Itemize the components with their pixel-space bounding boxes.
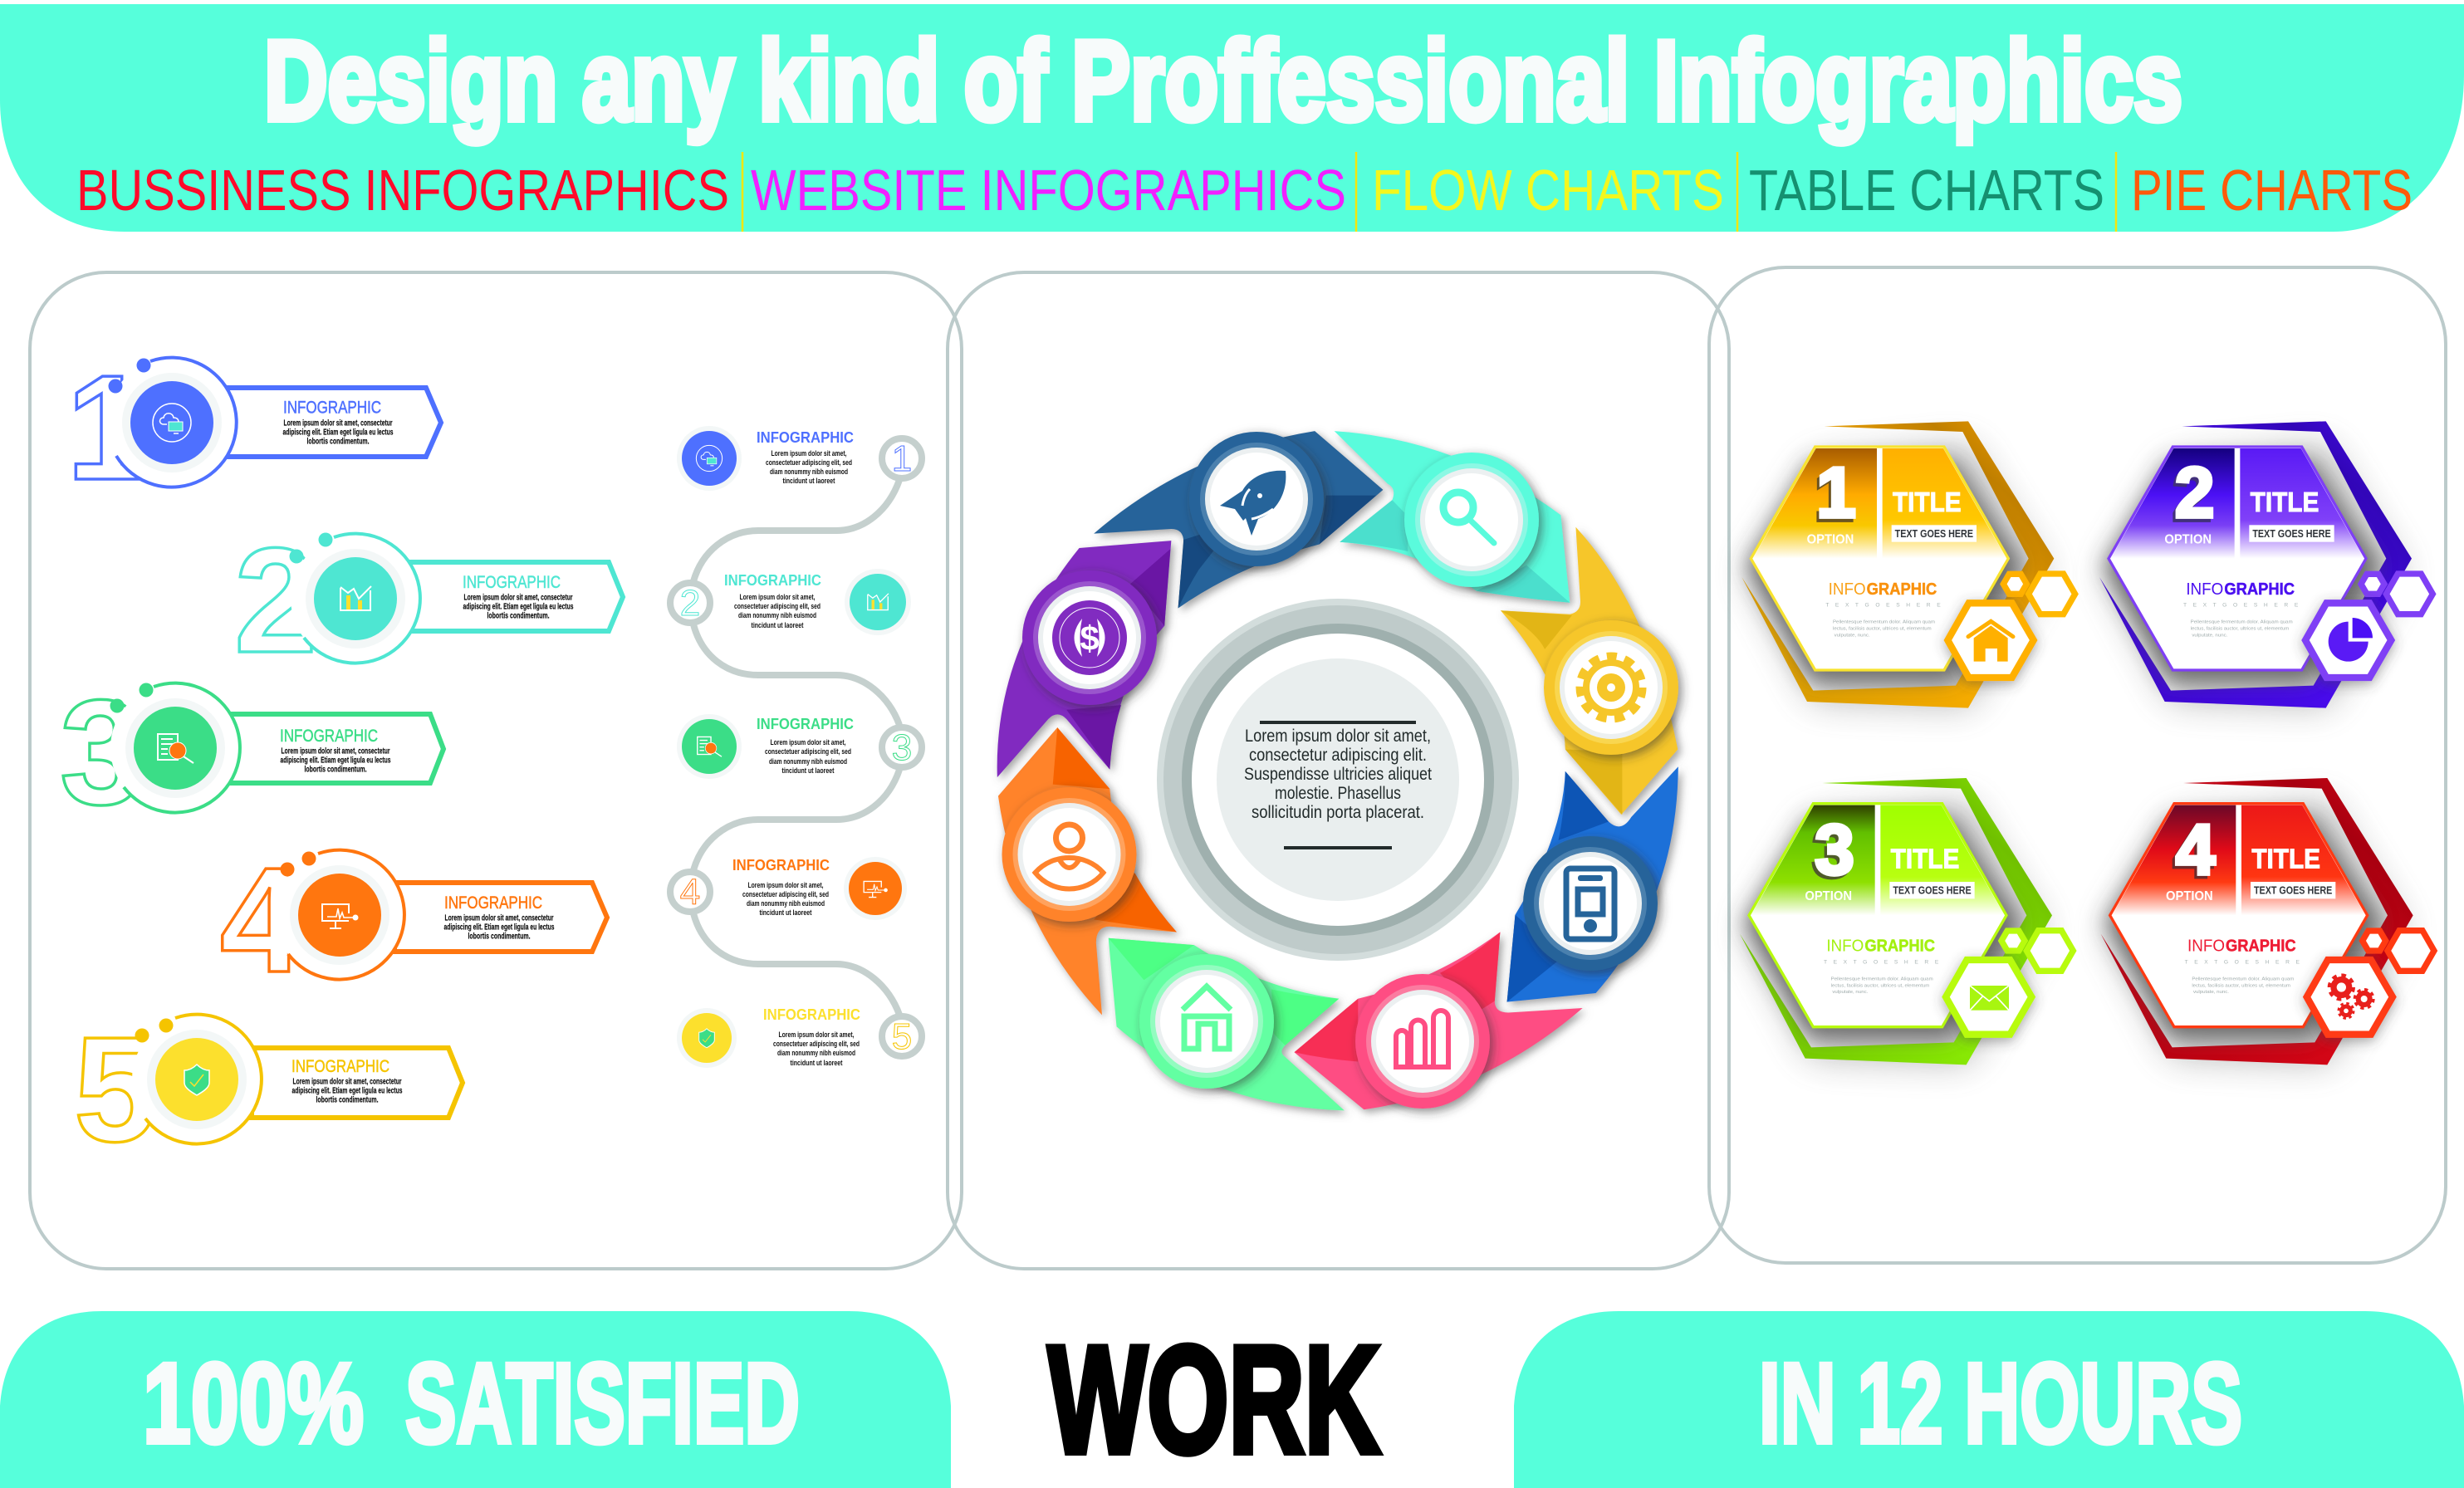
option 3 card: 3 — [1812, 814, 1851, 893]
timeline node 2 — [670, 583, 710, 624]
footer: right tab — [1514, 1311, 2464, 1488]
step 4: adipiscing elit. Etiam eget ligula eu lectus — [443, 923, 555, 932]
timeline entry 3: INFOGRAPHIC — [757, 715, 854, 732]
arrow: purple — [997, 541, 1171, 777]
node: bar chart — [1355, 974, 1490, 1109]
timeline node 3: 3 — [892, 727, 912, 768]
option 1 card: OPTION — [1807, 532, 1854, 546]
option 2 card — [2099, 421, 2432, 708]
step 2: INFOGRAPHIC — [463, 573, 561, 592]
timeline path — [693, 480, 899, 1015]
central circle — [1157, 599, 1519, 961]
option 4 card: Pellentesque fermentum dolor. Aliquam quam — [2192, 976, 2295, 981]
timeline entry 3: diam nonummy nibh euismod — [769, 757, 847, 766]
timeline entry 4: consectetuer adipiscing elit, sed — [742, 890, 829, 899]
option 3 card: Pellentesque fermentum dolor. Aliquam quam — [1831, 976, 1933, 981]
node: magnifier — [1404, 453, 1539, 587]
option 2 card: GRAPHIC — [2224, 580, 2295, 599]
central text — [1244, 727, 1432, 822]
footer: left tab — [0, 1311, 951, 1488]
panel: winding timeline — [670, 426, 922, 1068]
arrow: pink — [1294, 932, 1583, 1109]
step 3: INFOGRAPHIC — [280, 727, 378, 746]
node: dollar: $ — [1080, 619, 1100, 658]
step 2: Lorem ipsum dolor sit amet, consectetur — [463, 593, 573, 603]
option 1 card: 1 — [1814, 457, 1854, 536]
timeline entry 2: Lorem ipsum dolor sit amet, — [739, 593, 816, 602]
step 2: adipiscing elit. Etiam eget ligula eu lectus — [463, 603, 574, 611]
step 2 — [234, 517, 623, 684]
option 3 card: vulputate, nunc. — [1832, 990, 1869, 995]
central text: Lorem ipsum dolor sit amet, — [1245, 727, 1431, 746]
step 3 — [60, 669, 443, 836]
timeline entry 2: tincidunt ut laoreet — [751, 621, 804, 630]
option 2 card: lectus, facilisis auctor, ultrices ut, elementum — [2191, 627, 2290, 632]
step 3: lobortis condimentum. — [304, 766, 367, 774]
timeline entry 4: Lorem ipsum dolor sit amet, — [747, 881, 824, 890]
option 4 card: 4 — [2176, 810, 2215, 889]
timeline entry 2: INFOGRAPHIC — [724, 571, 821, 589]
option 1 card: 1 — [1816, 454, 1856, 533]
node: person — [1002, 787, 1136, 922]
node: gear — [1544, 620, 1678, 755]
arrow: navy — [1094, 431, 1383, 608]
option 3 card — [1740, 778, 2073, 1065]
arrow: orange — [998, 727, 1177, 1015]
step 2: 2 — [234, 517, 317, 684]
arrow: green — [1109, 938, 1345, 1110]
option 3 card: OPTION — [1805, 889, 1852, 903]
option 4 card: GRAPHIC — [2226, 937, 2296, 956]
panel: circular arrow cycle — [997, 431, 1678, 1110]
central text: Suspendisse ultricies aliquet — [1244, 765, 1432, 784]
panel: outlined frames — [30, 267, 2446, 1269]
timeline entry 3: tincidunt ut laoreet — [782, 766, 835, 776]
timeline entry 5 — [677, 1006, 860, 1068]
timeline node 3 — [882, 727, 922, 768]
timeline node 4: 4 — [680, 872, 700, 913]
option 3 card: lectus, facilisis auctor, ultrices ut, elementum — [1831, 983, 1930, 988]
banner background — [0, 4, 2464, 232]
category: bussiness infographics: BUSSINESS INFOGRAPHICS — [76, 158, 729, 223]
timeline entry 4: tincidunt ut laoreet — [759, 908, 812, 918]
timeline entry 1: INFOGRAPHIC — [757, 428, 854, 446]
timeline entry 1: diam nonummy nibh euismod — [770, 467, 848, 477]
step 3: 3 — [60, 669, 143, 836]
option 1 card: T E X T G O E S H E R E — [1825, 603, 1941, 609]
step 1 — [66, 345, 441, 512]
timeline node 1: 1 — [892, 438, 912, 479]
step 4 — [220, 837, 607, 1004]
timeline node 2: 2 — [680, 583, 700, 624]
node: home — [1139, 954, 1274, 1089]
step 4: INFOGRAPHIC — [444, 893, 542, 913]
option 3 card: INFO — [1826, 937, 1864, 956]
timeline entry 1 — [677, 426, 854, 491]
step 1: adipiscing elit. Etiam eget ligula eu lectus — [282, 428, 394, 437]
step 5: adipiscing elit. Etiam eget ligula eu lectus — [292, 1086, 403, 1096]
category: website infographics: WEBSITE INFOGRAPHICS — [751, 158, 1346, 223]
step 5: lobortis condimentum. — [316, 1096, 379, 1104]
panel: hexagon options — [1740, 421, 2434, 1065]
node: rocket — [1189, 432, 1324, 566]
timeline entry 1: consectetuer adipiscing elit, sed — [766, 458, 852, 467]
footer text: satisfied: SATISFIED — [405, 1340, 800, 1467]
option 4 card: T E X T G O E S H E R E — [2185, 959, 2300, 965]
option 1 card: GRAPHIC — [1867, 580, 1937, 599]
step 5: Lorem ipsum dolor sit amet, consectetur — [292, 1078, 402, 1086]
footer text: in 12 hours: IN 12 HOURS — [1759, 1340, 2242, 1467]
option 1 card: TITLE — [1893, 487, 1962, 518]
central text: sollicitudin porta placerat. — [1252, 803, 1424, 822]
option 4 card: vulputate, nunc. — [2193, 990, 2229, 995]
header banner — [0, 4, 2464, 232]
timeline node 5 — [882, 1016, 922, 1057]
option 1 card: TEXT GOES HERE — [1895, 528, 1973, 540]
option 4 card: INFO — [2187, 937, 2225, 956]
option 2 card: INFO — [2186, 580, 2223, 599]
option 2 card: vulputate, nunc. — [2192, 633, 2228, 638]
timeline entry 4 — [732, 856, 907, 920]
option 1 card: lectus, facilisis auctor, ultrices ut, elementum — [1833, 627, 1932, 632]
category: flow charts: FLOW CHARTS — [1372, 158, 1724, 223]
option 3 card: 3 — [1815, 810, 1854, 889]
option 1 card: INFO — [1829, 580, 1866, 599]
central text: molestie. Phasellus — [1275, 784, 1401, 803]
option 2 card: T E X T G O E S H E R E — [2183, 603, 2299, 609]
panel: numbered arrow list — [60, 345, 623, 1173]
node: phone — [1523, 836, 1658, 971]
timeline node 1 — [882, 438, 922, 479]
option 1 card: Pellentesque fermentum dolor. Aliquam quam — [1833, 620, 1935, 625]
timeline node 4 — [670, 872, 710, 913]
arrow: yellow — [1501, 527, 1678, 815]
option 3 card: TITLE — [1891, 844, 1959, 875]
option 2 card: TEXT GOES HERE — [2252, 528, 2331, 540]
step 3: Lorem ipsum dolor sit amet, consectetur — [281, 747, 390, 756]
node: dollar — [1022, 570, 1157, 705]
cycle arrows — [997, 431, 1678, 1110]
option 3 card: T E X T G O E S H E R E — [1824, 959, 1939, 965]
step 4: Lorem ipsum dolor sit amet, consectetur — [445, 913, 554, 923]
timeline entry 5: diam nonummy nibh euismod — [777, 1049, 855, 1058]
timeline entry 2 — [724, 569, 911, 635]
option 4 card — [2101, 778, 2434, 1065]
timeline entry 1: Lorem ipsum dolor sit amet, — [771, 449, 847, 458]
timeline entry 5: consectetuer adipiscing elit, sed — [773, 1040, 860, 1049]
footer text: 100%: 100% — [143, 1340, 364, 1467]
step 5: INFOGRAPHIC — [291, 1057, 389, 1076]
option 4 card: TITLE — [2251, 844, 2320, 875]
category: table charts: TABLE CHARTS — [1749, 158, 2104, 223]
timeline entry 5: INFOGRAPHIC — [763, 1006, 860, 1023]
option 4 card: TEXT GOES HERE — [2254, 885, 2332, 897]
option 3 card: TEXT GOES HERE — [1893, 885, 1972, 897]
option 2 card: Pellentesque fermentum dolor. Aliquam quam — [2191, 620, 2293, 625]
step 5 — [74, 1006, 463, 1173]
timeline node 5: 5 — [892, 1016, 912, 1057]
option 2 card: 2 — [2175, 454, 2214, 533]
timeline entry 5: Lorem ipsum dolor sit amet, — [779, 1030, 854, 1040]
option 1 card — [1741, 421, 2075, 708]
timeline entry 2: consectetuer adipiscing elit, sed — [734, 602, 821, 611]
option 4 card: lectus, facilisis auctor, ultrices ut, elementum — [2192, 983, 2290, 988]
option 2 card: OPTION — [2164, 532, 2212, 546]
timeline entry 5: tincidunt ut laoreet — [791, 1059, 843, 1068]
timeline entry 1: tincidunt ut laoreet — [782, 477, 835, 486]
step 4: lobortis condimentum. — [468, 932, 531, 942]
step 1: Lorem ipsum dolor sit amet, consectetur — [284, 418, 393, 428]
step 3: adipiscing elit. Etiam eget ligula eu lectus — [281, 756, 391, 766]
timeline entry 4: diam nonummy nibh euismod — [747, 899, 825, 908]
timeline entry 3: consectetuer adipiscing elit, sed — [765, 747, 851, 756]
option 4 card: OPTION — [2166, 889, 2213, 903]
option 4 card: 4 — [2173, 814, 2212, 893]
step 4: 4 — [220, 837, 303, 1004]
timeline entry 3: Lorem ipsum dolor sit amet, — [771, 738, 845, 747]
option 2 card: TITLE — [2251, 487, 2319, 518]
timeline entry 3 — [677, 714, 854, 779]
step 5: 5 — [74, 1006, 157, 1173]
option 3 card: GRAPHIC — [1864, 937, 1935, 956]
step 1: lobortis condimentum. — [307, 437, 370, 447]
step 1: INFOGRAPHIC — [283, 399, 381, 417]
arrow: blue — [1507, 766, 1678, 1002]
arrow: teal — [1335, 431, 1570, 603]
step 1: 1 — [66, 345, 149, 512]
footer text: work: WORK — [1048, 1314, 1380, 1485]
step 2: lobortis condimentum. — [487, 611, 550, 621]
timeline entry 2: diam nonummy nibh euismod — [738, 611, 816, 620]
option 1 card: vulputate, nunc. — [1835, 633, 1870, 638]
option 2 card: 2 — [2173, 457, 2212, 536]
timeline entry 4: INFOGRAPHIC — [732, 856, 830, 874]
central text: consectetur adipiscing elit. — [1249, 746, 1427, 765]
